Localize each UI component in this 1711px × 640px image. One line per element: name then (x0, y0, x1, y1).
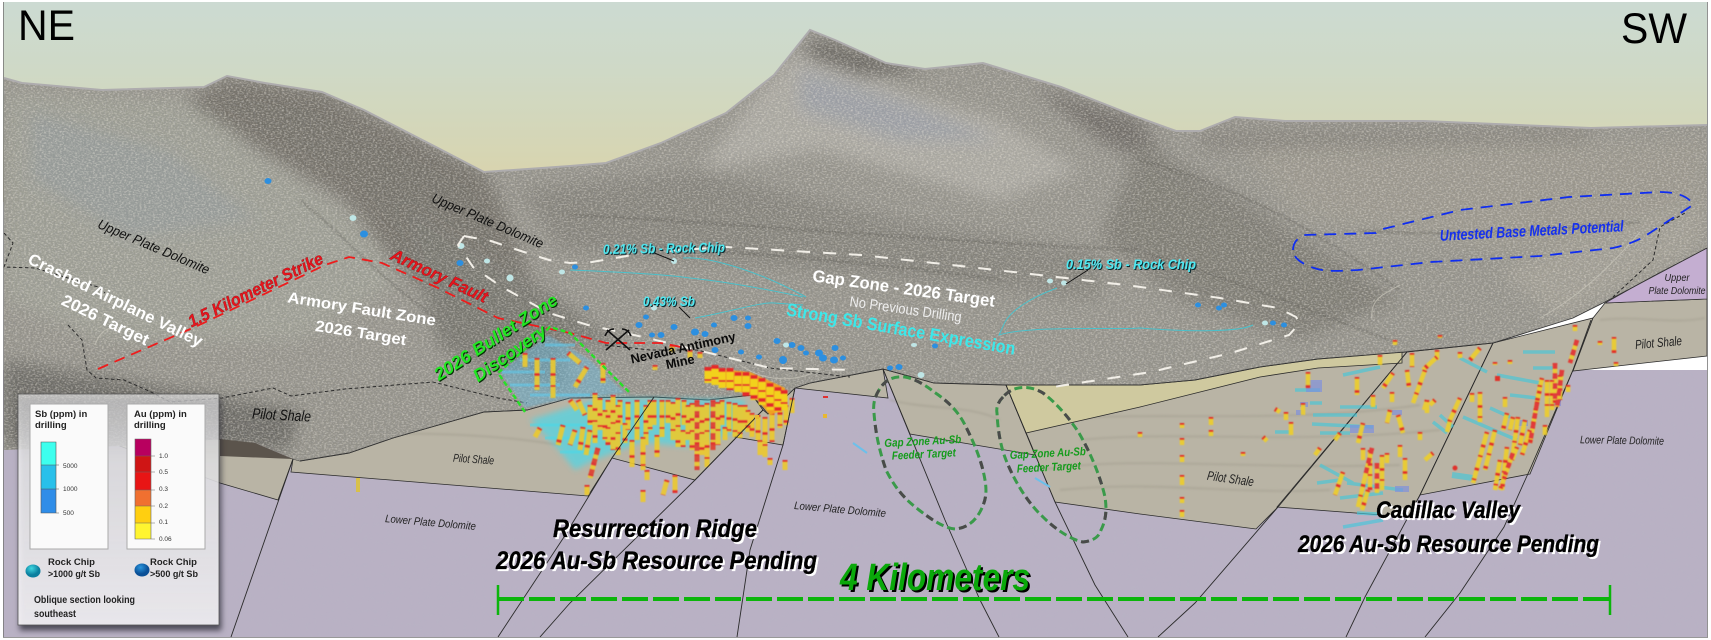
shale bedding striations (300, 318, 1705, 491)
resurrection ridge gold drilling (525, 345, 792, 502)
heading: resurrection ridge resource (495, 515, 817, 575)
legend: Au scale panel: 0.1 (159, 519, 168, 526)
label: crashed airplane valley target: Crashed Airplane Valley (25, 250, 206, 351)
surface trace contact (300, 248, 1707, 461)
legend: rock chip over 500: >500 g/t Sb (150, 569, 198, 580)
stray low-grade intercepts in lower plate (356, 396, 1050, 492)
cadillac valley lavender sb patches (1296, 380, 1561, 492)
legend: Au scale panel: Au (ppm) in (134, 409, 187, 420)
legend: Sb scale panel (30, 404, 108, 549)
cadillac valley gold drilling (1140, 325, 1616, 517)
label: gap zone feeder target 2: Feeder Target (1017, 460, 1082, 476)
panel: legend (18, 394, 219, 625)
armory fault dashed line (98, 257, 686, 369)
legend: Sb scale panel: 500 (63, 510, 74, 517)
legend: Au scale panel: drilling (134, 420, 166, 431)
legend: section note: Oblique section looking (34, 595, 135, 606)
legend: Au scale panel: 0.5 (159, 469, 168, 476)
legend: rock chip over 500: Rock Chip (150, 557, 197, 568)
label: nevada antimony mine: Nevada Antimony (629, 329, 738, 367)
legend: Au scale panel (127, 404, 205, 549)
legend: rock chip over 1000: Rock Chip (48, 557, 95, 568)
label: pilot shale section centre: Pilot Shale (1206, 468, 1255, 489)
lower plate dolomite section base (3, 370, 1707, 637)
direction label SW: SW (1621, 5, 1687, 53)
legend: section note: southeast (34, 609, 77, 620)
legend: Au scale panel: 0.06 (159, 536, 172, 543)
label: armory fault zone target (286, 289, 438, 349)
label: 4 kilometers: 4 Kilometers (839, 557, 1030, 599)
label: gap zone feeder target 1: Feeder Target (892, 447, 957, 463)
label: no previous drilling: No Previous Drilling (848, 294, 963, 326)
label: armory fault zone target: Armory Fault Zone (286, 289, 438, 330)
label: gap zone feeder target 1 (884, 434, 962, 463)
bullet zone drilling colour (500, 335, 625, 408)
label: armory fault zone target: 2026 Target (314, 318, 407, 349)
label: upper plate dolomite centre: Upper Plate Dolomite (430, 191, 546, 251)
gap zone target outline (458, 236, 1300, 388)
legend: Sb scale panel: 1000 (63, 486, 78, 493)
label: lower plate dolomite left: Lower Plate Dolomite (385, 513, 476, 533)
sky background (3, 2, 1707, 202)
heading: cadillac valley resource: 2026 Au-Sb Resource Pending (1297, 531, 1599, 558)
label: 2026 bullet zone discovery: 2026 Bullet Zone (429, 289, 561, 385)
ridge highlight (4, 30, 1707, 172)
legend: Au scale panel: 1.0 (159, 453, 168, 460)
label: 0.15% Sb rock chip: 0.15% Sb - Rock Chip (1066, 257, 1196, 272)
faults (231, 320, 1591, 637)
heading: cadillac valley resource: Cadillac Valley (1376, 497, 1521, 524)
heading: resurrection ridge resource: 2026 Au-Sb Resource Pending (495, 547, 817, 575)
label: gap zone feeder target 2 (1010, 446, 1086, 476)
label: lower plate dolomite right: Lower Plate Dolomite (1580, 434, 1664, 448)
label: gap zone feeder target 1: Gap Zone Au-Sb (884, 434, 962, 450)
label: untested base metals potential: Untested Base Metals Potential (1439, 218, 1625, 245)
resurrection ridge sb drilling (530, 398, 745, 470)
terrain surface (0, 20, 1711, 470)
heading: cadillac valley resource (1297, 497, 1599, 558)
label: 0.43% Sb: 0.43% Sb (643, 294, 695, 309)
legend: Au scale panel: 0.2 (159, 503, 168, 510)
legend: rock chip over 1000: >1000 g/t Sb (48, 569, 100, 580)
gap zone feeder target ellipse 2 (997, 387, 1106, 542)
label: pilot shale section left: Pilot Shale (453, 453, 494, 467)
legend: Sb scale panel: drilling (35, 420, 67, 431)
leader lines for rock chip labels (652, 252, 1088, 318)
gap zone feeder target ellipse 1 (874, 377, 986, 529)
legend: section note (34, 595, 135, 620)
legend: Sb scale panel: 5000 (63, 463, 78, 470)
label: upper plate dolomite right (1648, 272, 1706, 297)
strong Sb surface expression outlines (570, 258, 1253, 335)
label: 2026 bullet zone discovery: Discovery (469, 320, 551, 386)
dark shale lens (220, 439, 293, 459)
contact dashed traces (4, 213, 1685, 403)
rock chip samples (264, 178, 1287, 378)
legend: Au scale panel: 0.3 (159, 486, 168, 493)
legend: Sb scale panel: Sb (ppm) in (35, 409, 87, 420)
upper plate dolomite block, right edge (1605, 248, 1707, 303)
legend: rock chip over 500 (134, 557, 198, 580)
scale bar: 4 kilometers (498, 585, 1610, 615)
label: upper plate dolomite left: Upper Plate Dolomite (96, 217, 212, 277)
heading: resurrection ridge resource: Resurrection Ridge (553, 515, 757, 543)
untested base metals dashed outline (1293, 192, 1693, 271)
yellow shale wedge (1006, 352, 1402, 433)
direction label NE: NE (18, 2, 75, 50)
label: pilot shale upper: Pilot Shale (252, 405, 311, 426)
pilot shale blocks (109, 299, 1707, 529)
icon: crossed picks mine symbol (605, 329, 631, 350)
label: strong Sb surface expression: Strong Sb Surface Expression (785, 299, 1017, 359)
bullet zone dashed outline (498, 327, 630, 412)
label: nevada antimony mine: Mine (664, 351, 696, 372)
cadillac valley sb drilling (1275, 352, 1555, 527)
label: 1.5 kilometer strike: 1.5 Kilometer Strike (185, 249, 326, 331)
label: 0.21% Sb rock chip: 0.21% Sb - Rock Chip (603, 240, 725, 257)
label: lower plate dolomite centre: Lower Plate Dolomite (794, 500, 886, 520)
label: upper plate dolomite right: Upper (1664, 272, 1690, 284)
label: armory fault: Armory Fault (387, 245, 492, 307)
label: pilot shale section right: Pilot Shale (1634, 333, 1683, 352)
label: crashed airplane valley target: 2026 Target (59, 292, 152, 350)
label: gap zone feeder target 2: Gap Zone Au-Sb (1010, 446, 1086, 462)
legend: rock chip over 1000 (26, 557, 100, 580)
label: gap zone 2026 target: Gap Zone - 2026 Target (811, 266, 997, 311)
